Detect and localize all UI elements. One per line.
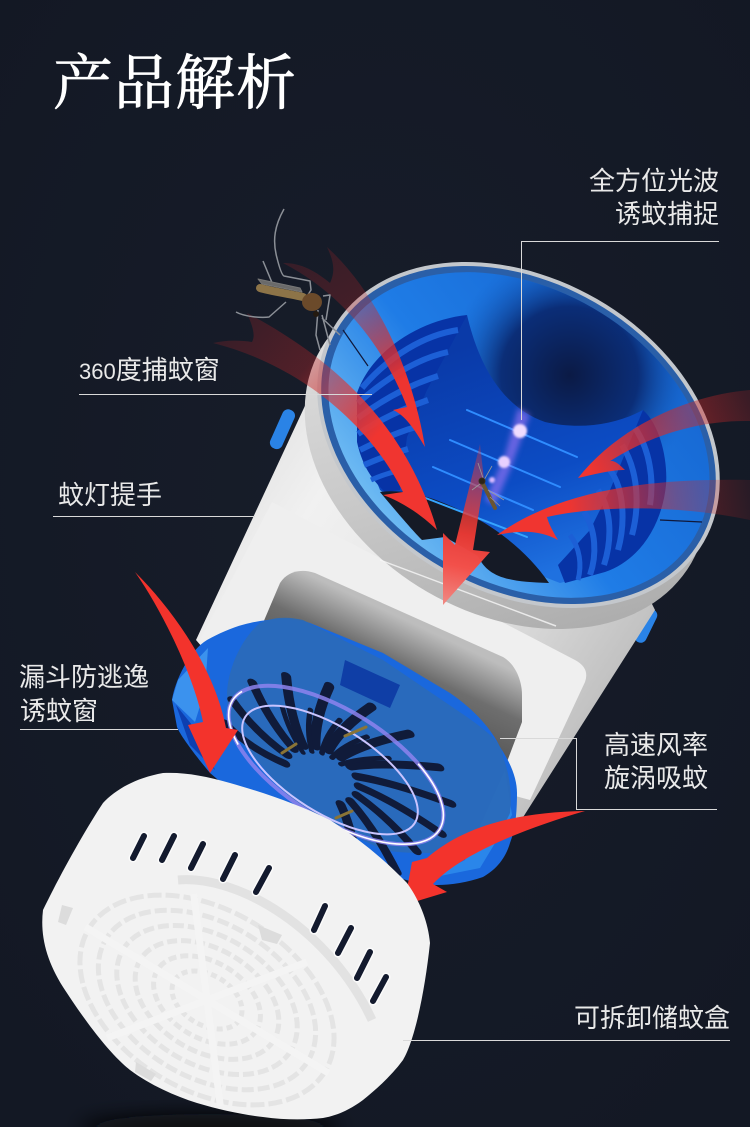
removable storage box [39,773,430,1127]
arrow 3 [578,390,750,478]
trapped mosquito [472,463,504,508]
mosquito lamp [172,192,750,899]
right fins [558,410,666,583]
grille [39,850,375,1127]
collar highlight [380,560,556,626]
label: full-range light: 诱蚊捕捉 [615,199,719,229]
label: storage box: 可拆卸储蚊盒 [574,1003,730,1033]
label: high speed fan: 旋涡吸蚊 [604,763,708,793]
grey recess [263,571,522,775]
body panel [200,502,586,800]
label: window: 360度捕蚊窗 [79,355,220,385]
label: high speed fan: 高速风率 [604,730,708,760]
arrow 5 [443,444,490,605]
disc dome [227,618,511,853]
arrow 2 [213,313,437,530]
swirl rings [204,655,468,875]
handle button right [633,607,659,645]
rim collar [242,213,750,699]
rim seam lines [343,330,702,522]
label: full-range light: 全方位光波 [589,166,719,196]
box tabs [58,905,282,1081]
small mosquitoes on fan [282,727,366,818]
dome clip block [340,660,400,708]
label: funnel [19,662,178,730]
arrow 4 [497,480,750,540]
mosquito outside [236,209,340,350]
electric grid light streaks [423,410,577,537]
lower blue disc [172,618,517,899]
dark opening [380,491,549,583]
funnel centre panel [360,315,645,583]
mosquito legs [275,209,311,298]
mosquito abdomen [260,288,303,297]
box face shade band [178,880,372,1020]
label: high speed fan [500,730,717,810]
handle button left [268,407,297,451]
label: handle: 蚊灯提手 [58,480,162,510]
rim outer silver [255,192,750,678]
disc lobes [172,648,208,722]
rim blue band [260,197,750,673]
label: funnel: 诱蚊窗 [20,696,98,726]
box shell [42,773,430,1119]
arrow 1 [283,247,425,447]
air slots [133,836,386,1001]
left fins [357,315,467,492]
fan slots [187,643,479,899]
disc base [172,619,517,885]
mosquito thorax [302,293,322,311]
label: funnel: 漏斗防逃逸 [19,662,149,692]
title: 产品解析 [53,51,297,117]
arrow 7 [404,811,585,905]
lamp body [196,395,655,822]
funnel face [270,206,750,664]
red arrows into funnel [135,247,750,905]
ground shadow [80,1114,340,1127]
funnel deep hollow [470,278,680,439]
label: full-range light [522,166,719,420]
light sparkles [485,408,530,505]
mosquito wing [258,279,302,292]
arrow 6 [135,572,238,773]
